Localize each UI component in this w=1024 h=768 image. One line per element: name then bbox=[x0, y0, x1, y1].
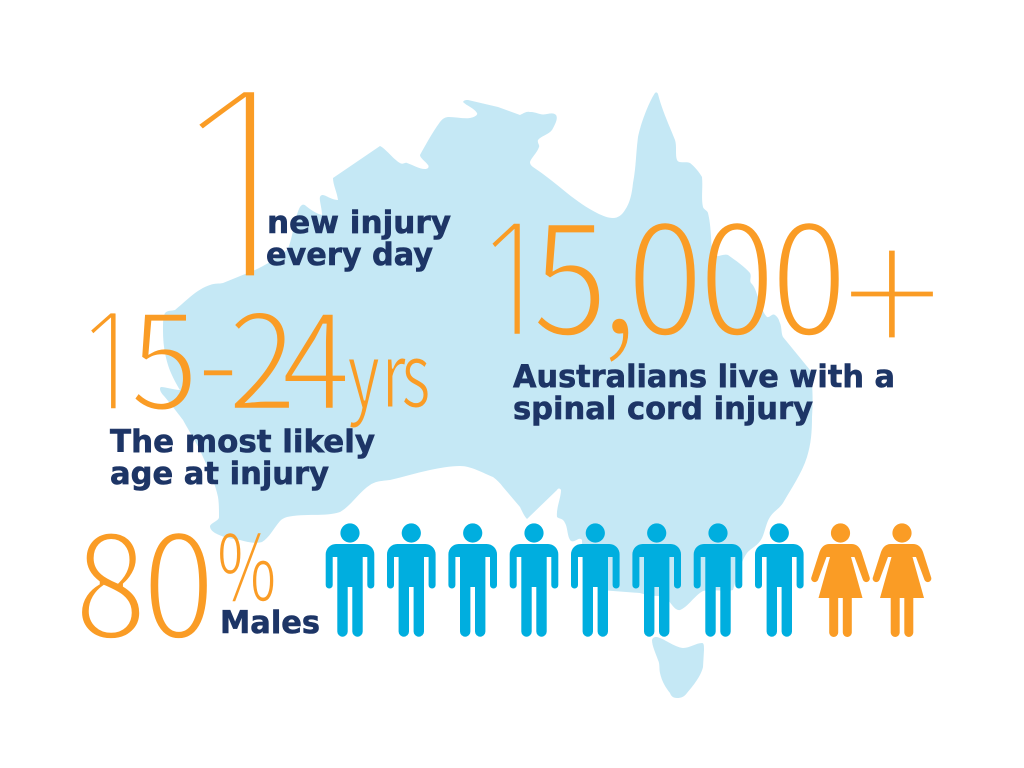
map of Australia bbox=[160, 92, 813, 698]
icon: man 2 bbox=[387, 523, 436, 637]
stat: 15,000+ Australians bbox=[492, 223, 933, 426]
big number 15-24: 15-24 bbox=[71, 257, 351, 449]
pictogram row: 8 men and 2 women bbox=[326, 523, 931, 637]
stat: one new injury every day bbox=[199, 92, 451, 276]
stat: 15-24 yrs most likely age bbox=[91, 313, 428, 491]
caption: new injury every day bbox=[266, 205, 451, 273]
stat: 80% males bbox=[82, 533, 319, 638]
icon: man 7 bbox=[694, 523, 742, 637]
caption: Australians live with a spinal cord injury: Australians live with a bbox=[513, 359, 895, 395]
caption: new injury every day: new injury bbox=[267, 205, 451, 241]
big number 15,000: 15,000 bbox=[470, 159, 848, 381]
caption: new injury every day: every day bbox=[266, 237, 433, 273]
icon: woman 2 bbox=[873, 523, 931, 637]
plus sign: + bbox=[840, 146, 944, 417]
caption: Australians live with a spinal cord injury bbox=[513, 359, 895, 427]
caption: the most likely age at injury: age at injury bbox=[110, 456, 329, 492]
icon: man 1 bbox=[326, 523, 374, 637]
mainland bbox=[160, 92, 813, 610]
icon: man 5 bbox=[571, 523, 620, 637]
caption: Australians live with a spinal cord injury: spinal cord injury bbox=[513, 391, 813, 427]
icon: man 8 bbox=[755, 523, 804, 637]
percent sign: % bbox=[217, 494, 276, 628]
big number 1: 1 bbox=[150, 58, 331, 318]
icon: man 4 bbox=[510, 523, 558, 637]
icon: woman 1 bbox=[811, 523, 870, 637]
icon: man 6 bbox=[632, 523, 681, 637]
big number 80: 80 bbox=[74, 472, 215, 680]
caption: the most likely age at injury: The most likely bbox=[110, 424, 375, 460]
icon: man 3 bbox=[448, 523, 497, 637]
caption: Males: Males bbox=[220, 605, 320, 641]
unit: yrs: yrs bbox=[347, 304, 431, 434]
caption: the most likely age at injury bbox=[110, 424, 375, 492]
Tasmania bbox=[652, 637, 704, 698]
